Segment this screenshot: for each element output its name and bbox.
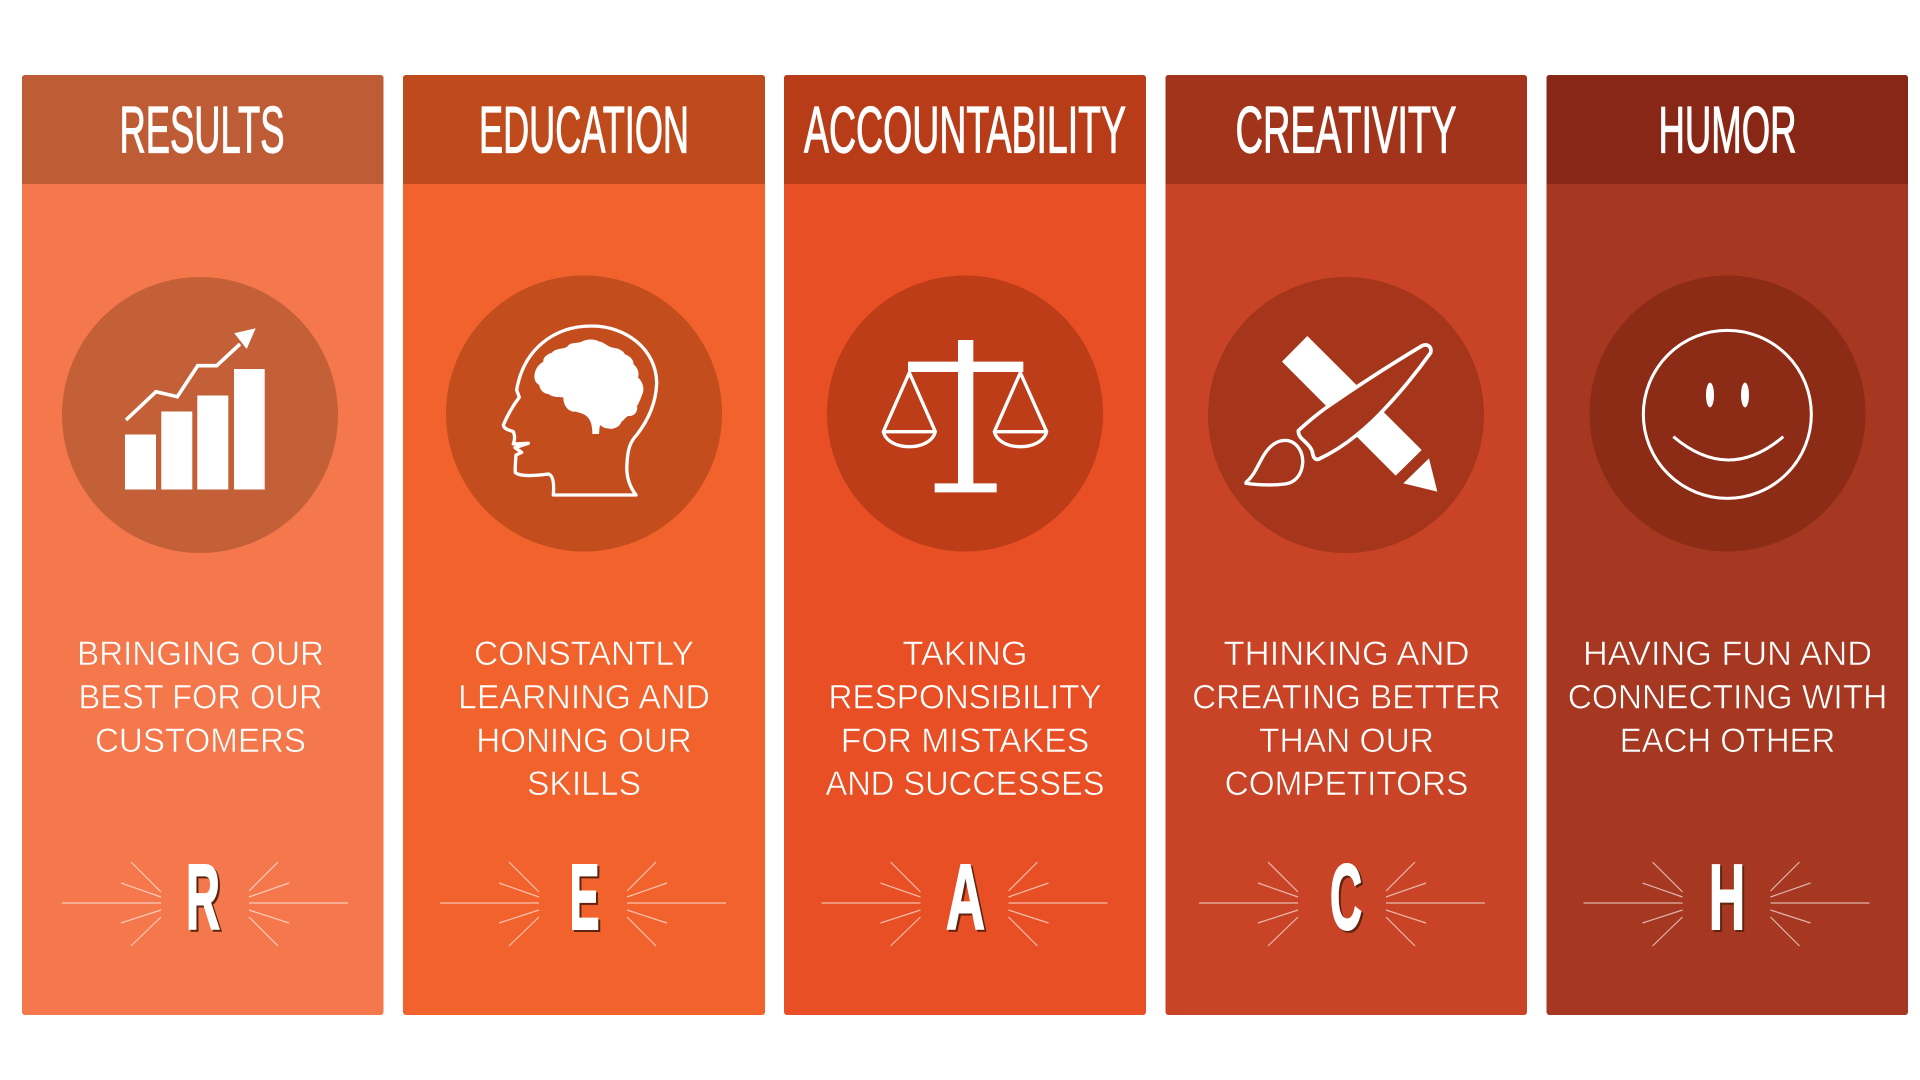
- panel: accountability: [784, 75, 1146, 1015]
- panel: creativity: C: [1330, 845, 1362, 949]
- description: BRINGING OUR: [77, 635, 324, 673]
- header band: [1546, 75, 1908, 184]
- burst rays: [62, 862, 348, 946]
- description: [458, 635, 710, 803]
- icon: smiley face: [1643, 330, 1811, 498]
- panel background: [1166, 75, 1527, 1015]
- description: CREATING BETTER: [1192, 678, 1501, 716]
- icon circle: [827, 276, 1103, 552]
- heading: EDUCATION: [479, 92, 689, 166]
- description: BEST FOR OUR: [78, 678, 322, 716]
- icon: head with brain: [503, 326, 657, 495]
- burst rays: [1199, 862, 1485, 946]
- description: [1192, 635, 1501, 803]
- description: [826, 635, 1104, 803]
- description: EACH OTHER: [1620, 722, 1835, 760]
- icon circle: [1590, 276, 1866, 552]
- description: [77, 635, 324, 760]
- heading: CREATIVITY: [1236, 92, 1456, 166]
- panel: creativity: [1166, 75, 1527, 1015]
- panel: humor: [1546, 75, 1908, 1015]
- panel: results: [22, 75, 384, 1015]
- panel background: [22, 75, 384, 1015]
- heading: RESULTS: [120, 92, 284, 166]
- icon: bar chart with rising arrow: [125, 328, 265, 490]
- panel: education: E: [570, 845, 600, 949]
- description: CUSTOMERS: [95, 722, 306, 760]
- header band: [22, 75, 384, 184]
- burst rays: [440, 862, 726, 946]
- description: FOR MISTAKES: [841, 722, 1089, 760]
- panel: education: [403, 75, 765, 1015]
- icon circle: [1208, 277, 1484, 553]
- header band: [1166, 75, 1527, 184]
- description: SKILLS: [527, 765, 641, 803]
- icon: balance scales: [883, 340, 1047, 492]
- panel background: [1546, 75, 1908, 1015]
- panel background: [784, 75, 1146, 1015]
- description: TAKING: [902, 635, 1028, 673]
- description: HAVING FUN AND: [1583, 635, 1872, 673]
- description: RESPONSIBILITY: [828, 678, 1102, 716]
- description: CONSTANTLY: [474, 635, 694, 673]
- letter A: A: [946, 845, 985, 949]
- header band: [784, 75, 1146, 184]
- header band: [403, 75, 765, 184]
- description: THAN OUR: [1259, 722, 1434, 760]
- letter R: R: [186, 845, 220, 949]
- burst rays: [822, 862, 1108, 946]
- description: LEARNING AND: [458, 678, 710, 716]
- description: AND SUCCESSES: [826, 765, 1104, 803]
- panel background: [403, 75, 765, 1015]
- burst rays: [1584, 862, 1870, 946]
- description: [1568, 635, 1887, 760]
- description: COMPETITORS: [1225, 765, 1468, 803]
- icon circle: [446, 276, 722, 552]
- description: THINKING AND: [1224, 635, 1470, 673]
- heading: ACCOUNTABILITY: [804, 92, 1126, 166]
- icon circle: [62, 277, 338, 553]
- description: CONNECTING WITH: [1568, 678, 1887, 716]
- icon: pencil and paintbrush: [1246, 336, 1437, 492]
- description: HONING OUR: [476, 722, 692, 760]
- letter H: H: [1709, 845, 1745, 949]
- heading: HUMOR: [1658, 92, 1796, 166]
